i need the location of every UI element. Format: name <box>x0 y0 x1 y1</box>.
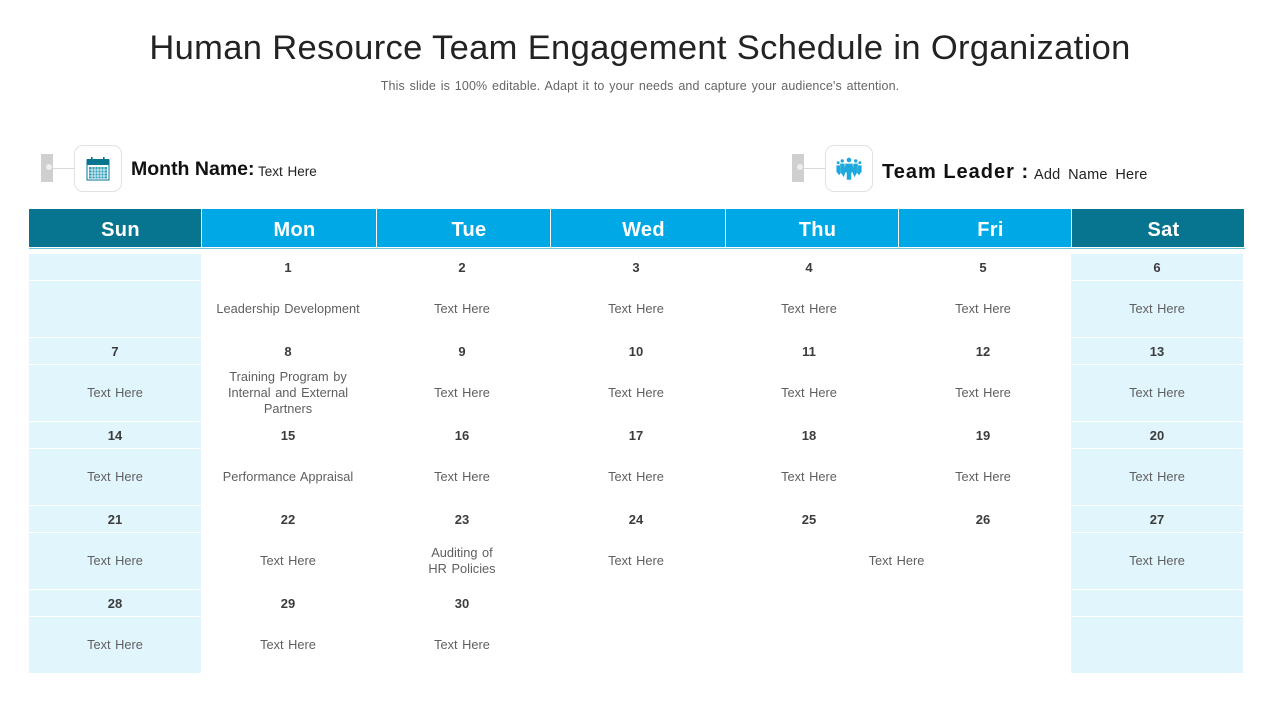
team leader block <box>792 145 1148 192</box>
title: Human Resource Team Engagement Schedule in Organization <box>149 29 1131 67</box>
day 4: 4 <box>805 260 813 275</box>
day 18: 18 <box>802 428 816 443</box>
day 14: 14 <box>108 428 122 443</box>
day 16 <box>434 428 490 484</box>
day 6 <box>1071 254 1243 337</box>
day 2: 2 <box>458 260 466 275</box>
day 21: 21 <box>108 512 122 527</box>
day 12 <box>955 344 1011 400</box>
day 29: 29 <box>281 596 295 611</box>
day 10 <box>608 344 664 400</box>
header: Tue: Tue <box>452 219 486 241</box>
day 18 <box>781 428 837 484</box>
day 14 <box>29 422 201 505</box>
day 19: Text Here <box>955 469 1011 484</box>
day 17: Text Here <box>608 469 664 484</box>
day 13 <box>1071 338 1243 421</box>
day 9 <box>434 344 490 400</box>
day 8: 8 <box>284 344 292 359</box>
day 23: HR Policies <box>428 561 496 576</box>
month name block <box>41 145 317 192</box>
icon: team <box>825 145 873 192</box>
day 26: 26 <box>976 512 990 527</box>
day 24: Text Here <box>608 553 664 568</box>
day 13: 13 <box>1150 344 1164 359</box>
day 29: Text Here <box>260 637 316 652</box>
day 7: 7 <box>111 344 119 359</box>
day 16: 16 <box>455 428 469 443</box>
header: Wed <box>551 209 725 247</box>
day 10: 10 <box>629 344 643 359</box>
day 6: 6 <box>1153 260 1161 275</box>
day 23: Auditing of <box>431 545 493 560</box>
day 21 <box>29 506 201 589</box>
day 27: 27 <box>1150 512 1164 527</box>
month name label: Month Name: <box>131 158 254 180</box>
day 24: 24 <box>629 512 643 527</box>
day 7: Text Here <box>87 385 143 400</box>
day 30 <box>434 596 490 652</box>
day 15: 15 <box>281 428 295 443</box>
header: Sat <box>1072 209 1244 247</box>
day 20: Text Here <box>1129 469 1185 484</box>
header: Mon <box>202 209 376 247</box>
day 28: 28 <box>108 596 122 611</box>
day 6: Text Here <box>1129 301 1185 316</box>
day 8: Internal and External <box>228 385 348 400</box>
day 22: 22 <box>281 512 295 527</box>
day 4 <box>781 260 837 316</box>
day 27: Text Here <box>1129 553 1185 568</box>
day 19: 19 <box>976 428 990 443</box>
header: Wed: Wed <box>622 219 665 241</box>
day 22: Text Here <box>260 553 316 568</box>
merged text for days 25-26: Text Here <box>869 553 924 568</box>
day 17 <box>608 428 664 484</box>
day 22 <box>260 512 316 568</box>
day 25: 25 <box>802 512 816 527</box>
day 14: Text Here <box>87 469 143 484</box>
day 7 <box>29 338 201 421</box>
day 5 <box>955 260 1011 316</box>
day 5: Text Here <box>955 301 1011 316</box>
header: Mon: Mon <box>274 219 316 241</box>
header: Sun: Sun <box>101 219 140 241</box>
header: Sat: Sat <box>1147 219 1180 241</box>
day 23: 23 <box>455 512 469 527</box>
day 4: Text Here <box>781 301 837 316</box>
day 3: Text Here <box>608 301 664 316</box>
day 27 <box>1071 506 1243 589</box>
day 23 <box>428 512 496 576</box>
day 3 <box>608 260 664 316</box>
header: Fri: Fri <box>977 219 1004 241</box>
day 19 <box>955 428 1011 484</box>
day 16: Text Here <box>434 469 490 484</box>
day 28: Text Here <box>87 637 143 652</box>
day 11 <box>781 344 837 400</box>
day 5: 5 <box>979 260 987 275</box>
week 5 Sat empty <box>1071 590 1243 673</box>
header: Sun <box>29 209 201 247</box>
day 2 <box>434 260 490 316</box>
calendar grid <box>29 254 1243 673</box>
day 8: Partners <box>264 401 312 416</box>
day 2: Text Here <box>434 301 490 316</box>
day 1 <box>216 260 360 316</box>
icon: calendar <box>74 145 122 192</box>
header: Fri <box>899 209 1071 247</box>
day 1: 1 <box>284 260 292 275</box>
day 12: Text Here <box>955 385 1011 400</box>
day 24 <box>608 512 664 568</box>
day 17: 17 <box>629 428 643 443</box>
day 20 <box>1071 422 1243 505</box>
weekday header <box>29 248 1245 249</box>
day 28 <box>29 590 201 673</box>
week 1 Sun empty <box>29 254 201 337</box>
day 30: 30 <box>455 596 469 611</box>
month name value: Text Here <box>258 164 317 179</box>
day 13: Text Here <box>1129 385 1185 400</box>
day 20: 20 <box>1150 428 1164 443</box>
day 21: Text Here <box>87 553 143 568</box>
day 8: Training Program by <box>229 369 347 384</box>
header: Thu: Thu <box>799 219 836 241</box>
day 15: Performance Appraisal <box>223 469 353 484</box>
day 3: 3 <box>632 260 640 275</box>
subtitle: This slide is 100% editable. Adapt it to your needs and capture your audience's attention. <box>381 79 899 93</box>
day 18: Text Here <box>781 469 837 484</box>
header: Tue <box>377 209 550 247</box>
day 15 <box>223 428 353 484</box>
day 9: 9 <box>458 344 466 359</box>
day 9: Text Here <box>434 385 490 400</box>
team leader label: Team Leader : <box>882 161 1029 183</box>
header: Thu <box>726 209 898 247</box>
day 1: Leadership Development <box>216 301 360 316</box>
day 8 <box>228 344 348 416</box>
team leader value: Add Name Here <box>1034 167 1148 183</box>
day 11: Text Here <box>781 385 837 400</box>
day 12: 12 <box>976 344 990 359</box>
day 30: Text Here <box>434 637 490 652</box>
day 10: Text Here <box>608 385 664 400</box>
day 11: 11 <box>802 344 816 359</box>
day 29 <box>260 596 316 652</box>
